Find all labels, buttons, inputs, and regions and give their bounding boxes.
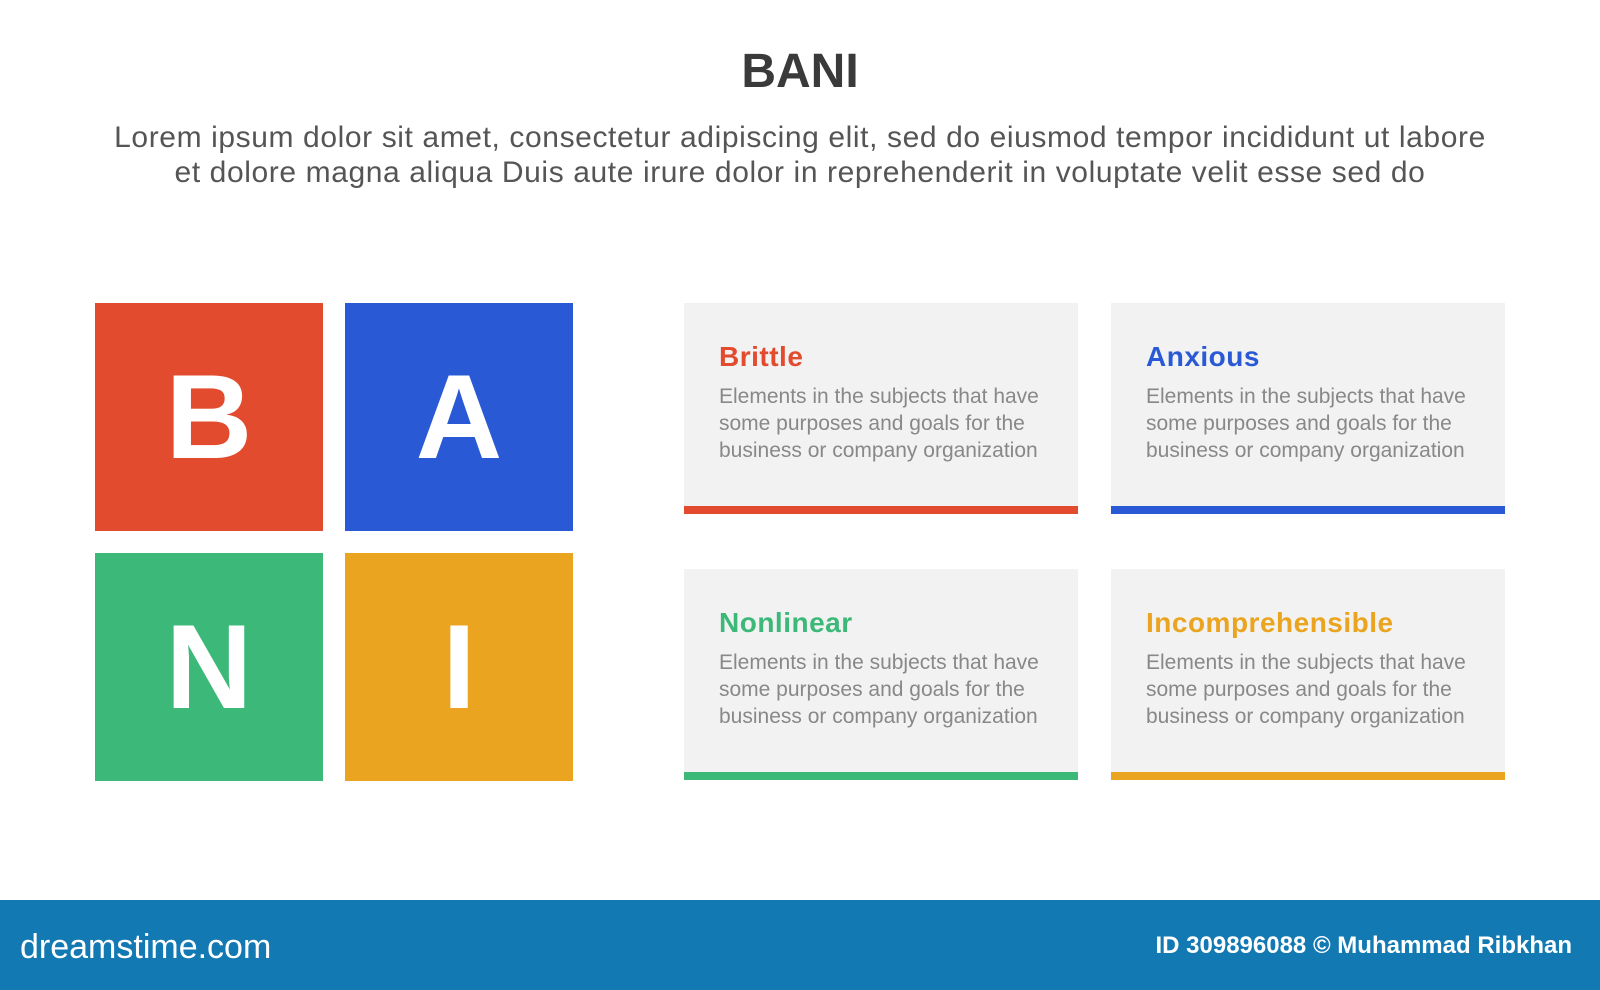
card: Incomprehensible: Incomprehensible [1146, 607, 1394, 638]
footer band [0, 900, 1600, 990]
card: Anxious: Anxious [1146, 341, 1260, 372]
square I: I [442, 600, 476, 734]
card: Brittle: Elements in the subjects that have some purposes and goals for the business or company organization [719, 385, 1039, 462]
square N [95, 553, 323, 781]
card: Nonlinear [684, 569, 1078, 780]
letter grid [95, 303, 573, 781]
card: Nonlinear: Nonlinear [719, 607, 853, 638]
card: Incomprehensible [1111, 569, 1505, 780]
footer credit: ID 309896088 © Muhammad Ribkhan [1155, 932, 1572, 959]
card: Incomprehensible: Elements in the subjects that have some purposes and goals for the business or company organization [1146, 651, 1466, 728]
card: Anxious [1111, 303, 1505, 514]
square A: A [416, 350, 502, 484]
card: Nonlinear: Elements in the subjects that have some purposes and goals for the business or company organization [719, 651, 1039, 728]
card: Brittle [684, 303, 1078, 514]
title: BANI [741, 45, 859, 98]
square I [345, 553, 573, 781]
square A [345, 303, 573, 531]
subtitle: Lorem ipsum dolor sit amet, consectetur adipiscing elit, sed do eiusmod tempor incididunt ut labore [114, 121, 1486, 154]
subtitle: et dolore magna aliqua Duis aute irure dolor in reprehenderit in voluptate velit esse sed do [175, 156, 1425, 189]
square B: B [166, 350, 252, 484]
footer logo: dreamstime.com [20, 928, 271, 966]
subtitle [114, 121, 1486, 189]
card: Anxious: Elements in the subjects that have some purposes and goals for the business or company organization [1146, 385, 1466, 462]
square N: N [166, 600, 252, 734]
square B [95, 303, 323, 531]
card: Brittle: Brittle [719, 341, 803, 372]
